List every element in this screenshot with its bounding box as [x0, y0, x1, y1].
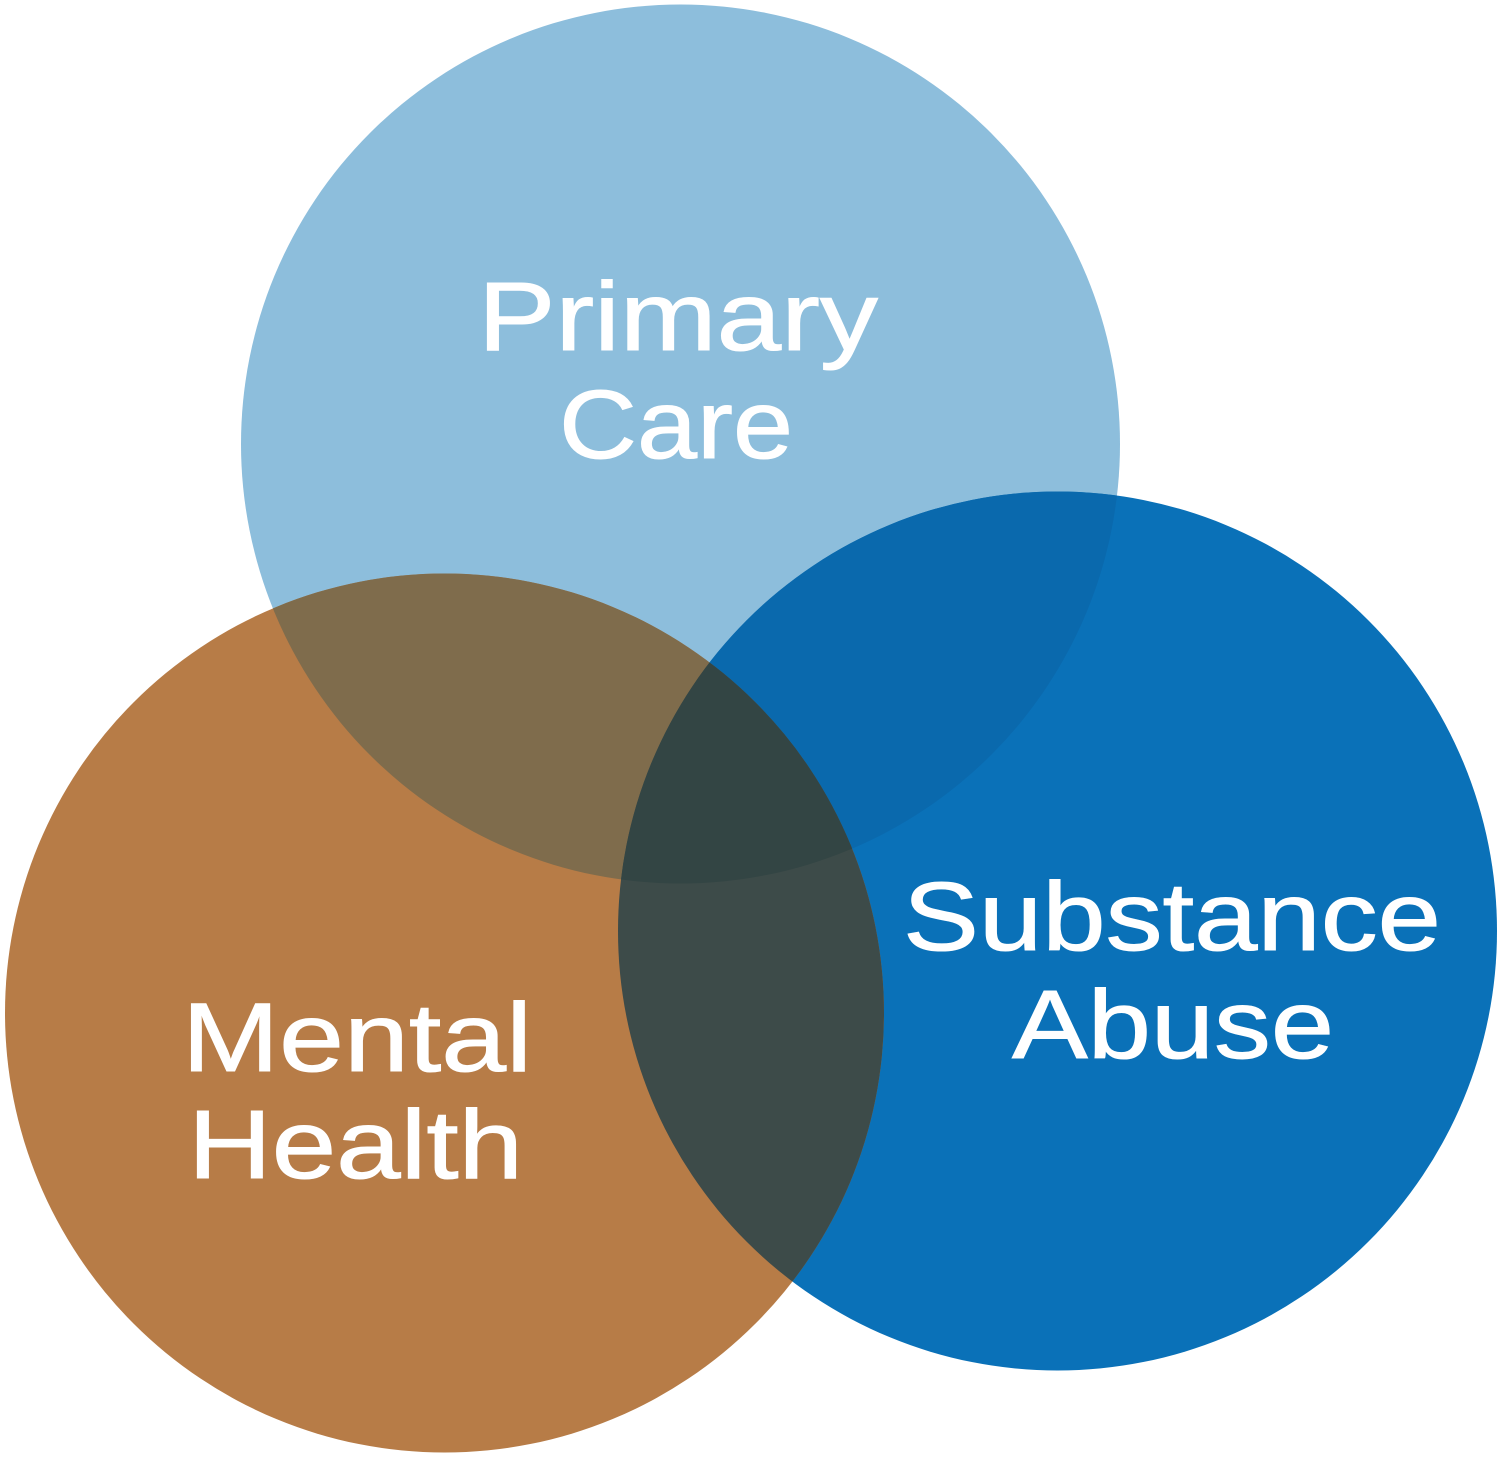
overlap: primary care and substance abuse	[710, 492, 1117, 848]
label: primary care	[478, 262, 879, 479]
label: primary care: Care	[559, 370, 793, 479]
label: mental health	[182, 983, 532, 1199]
overlap: all three circles	[621, 662, 852, 884]
label: mental health: Health	[188, 1090, 523, 1199]
label: mental health: Mental	[182, 983, 532, 1092]
circle: primary care	[241, 4, 1120, 884]
label: primary care: Primary	[478, 262, 879, 371]
label: substance abuse: Substance	[903, 862, 1441, 971]
label: substance abuse	[903, 862, 1441, 1079]
circle: substance abuse	[618, 492, 1497, 1370]
circle: mental health	[5, 574, 884, 1452]
label: substance abuse: Abuse	[1012, 970, 1334, 1079]
overlap: primary care and mental health	[273, 574, 852, 880]
overlap: mental health and substance abuse	[618, 662, 884, 1282]
